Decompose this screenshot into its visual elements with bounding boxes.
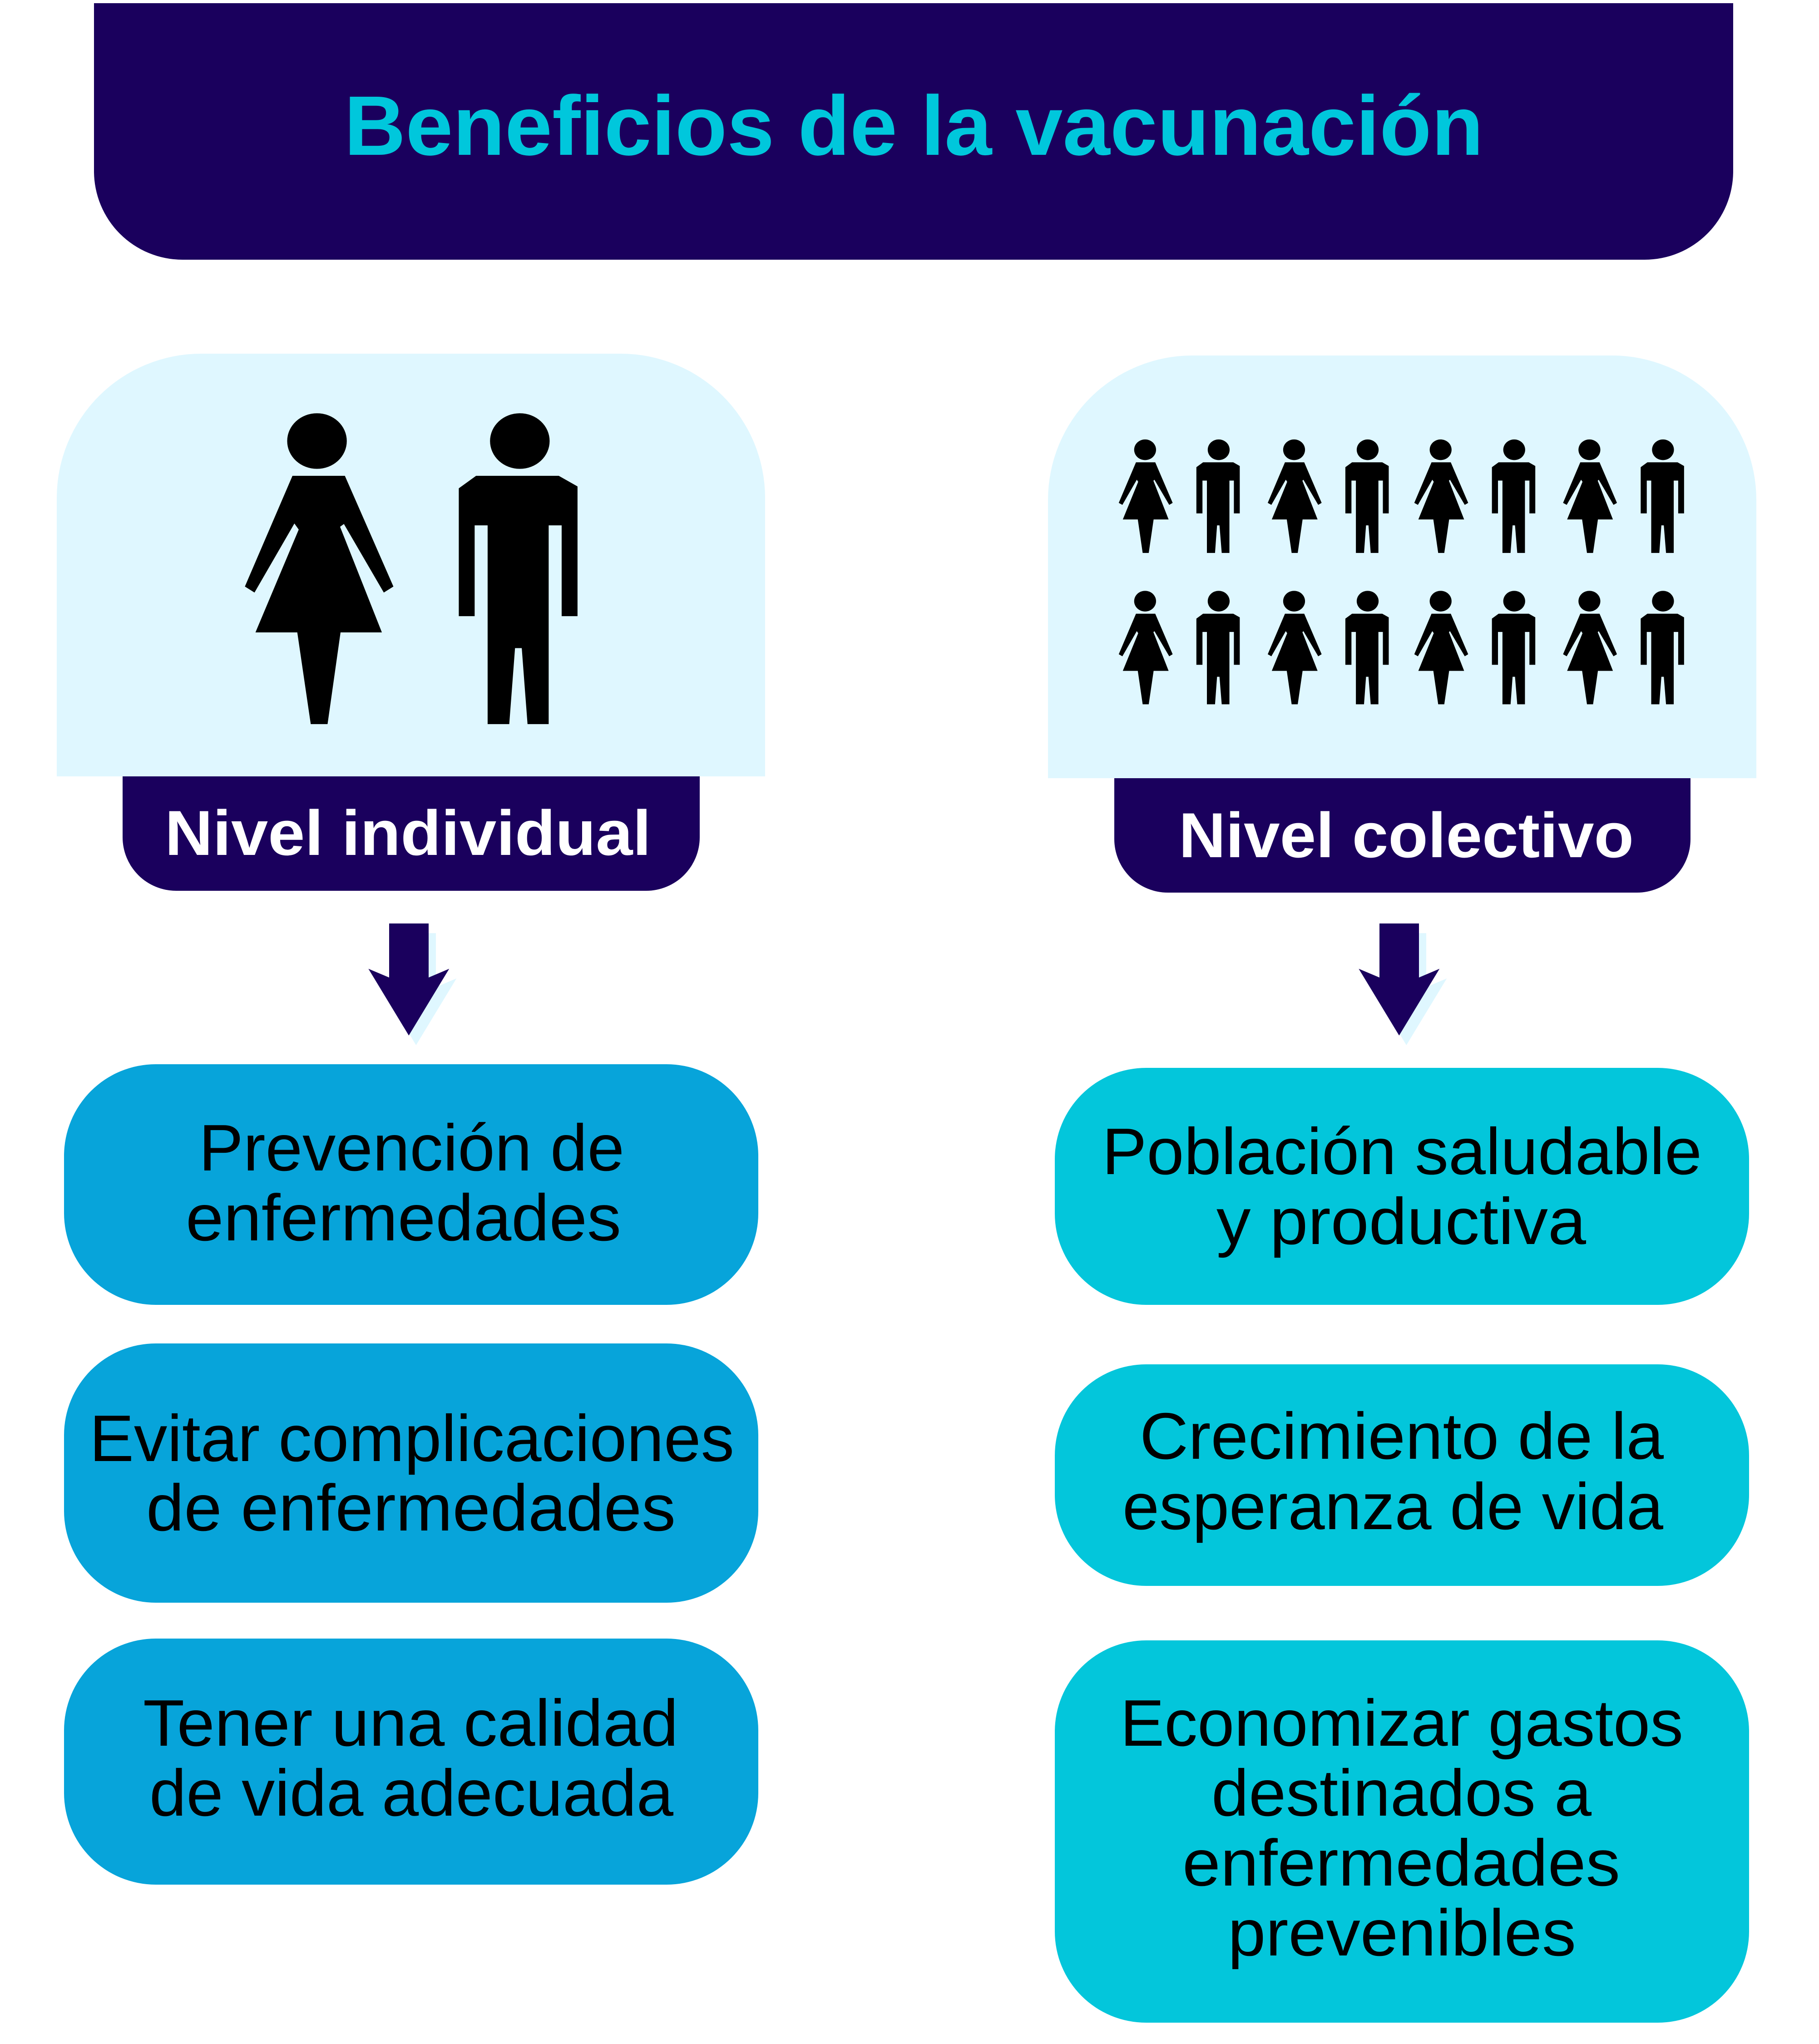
- icon: crowd of people: [1119, 439, 1684, 704]
- benefit: prevención de enfermedades: enfermedades: [186, 1181, 621, 1254]
- benefit: población saludable: Población saludable: [1102, 1115, 1702, 1188]
- benefit: evitar complicaciones: de enfermedades: [146, 1471, 676, 1545]
- benefit: evitar complicaciones: Evitar complicaciones: [89, 1402, 734, 1475]
- panel: nivel individual: [57, 354, 765, 776]
- benefit: economizar gastos: prevenibles: [1228, 1896, 1576, 1970]
- heading: nivel colectivo: [1114, 778, 1690, 893]
- benefit: esperanza de vida: esperanza de vida: [1122, 1470, 1663, 1543]
- benefit: calidad de vida: [64, 1639, 758, 1885]
- benefit: población saludable: y productiva: [1216, 1185, 1586, 1258]
- benefit: economizar gastos: [1055, 1640, 1749, 2023]
- heading: nivel individual: [123, 776, 700, 891]
- arrow: individual: [368, 923, 456, 1045]
- benefit: calidad de vida: de vida adecuada: [149, 1756, 673, 1830]
- heading: nivel individual: Nivel individual: [165, 797, 651, 869]
- title: Beneficios de la vacunación: [344, 79, 1483, 173]
- benefit: esperanza de vida: Crecimiento de la: [1140, 1399, 1664, 1473]
- icon: woman: [245, 413, 393, 724]
- benefit: evitar complicaciones: [64, 1343, 758, 1603]
- benefit: economizar gastos: Economizar gastos: [1120, 1686, 1683, 1760]
- benefit: población saludable: [1055, 1068, 1749, 1305]
- benefit: calidad de vida: Tener una calidad: [143, 1686, 678, 1760]
- icon: man: [459, 413, 578, 724]
- header banner: [94, 3, 1733, 260]
- benefit: prevención de enfermedades: [64, 1064, 758, 1305]
- benefit: economizar gastos: enfermedades: [1182, 1826, 1620, 1900]
- benefit: economizar gastos: destinados a: [1211, 1756, 1592, 1830]
- benefit: esperanza de vida: [1055, 1364, 1749, 1586]
- arrow: colectivo: [1359, 923, 1447, 1045]
- panel: nivel colectivo: [1048, 355, 1756, 778]
- heading: nivel colectivo: Nivel colectivo: [1179, 800, 1634, 871]
- benefit: prevención de enfermedades: Prevención de: [199, 1111, 624, 1185]
